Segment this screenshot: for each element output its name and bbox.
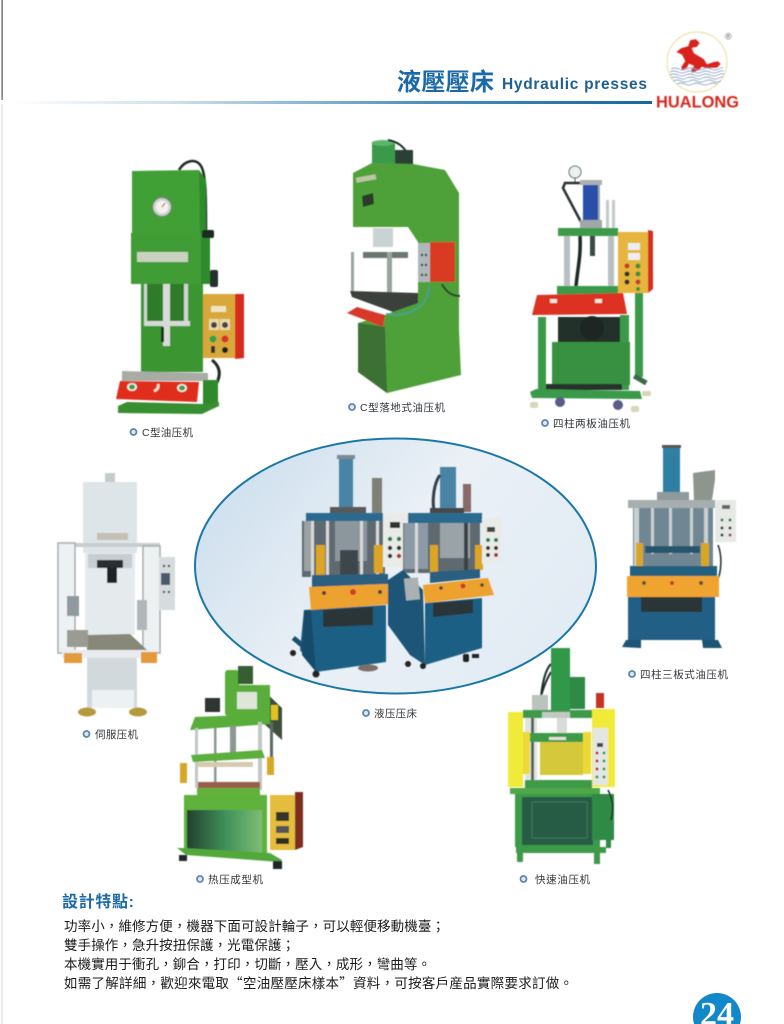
orange panel [309, 584, 394, 610]
control box [618, 230, 653, 293]
control box [418, 242, 455, 282]
section header rule [10, 101, 652, 104]
wheels and feet [530, 374, 651, 412]
left door [58, 543, 79, 653]
label: 液压压床: 液压压床 [374, 707, 418, 720]
label: 四柱三板式油压机: 四柱三板式油压机 [640, 668, 728, 681]
label: C型油压机: C型油压机 [142, 426, 194, 439]
control panel [482, 517, 502, 564]
machine: 伺服压机 [58, 473, 175, 716]
logo: Hualong dragon [656, 32, 739, 112]
label: C型落地式油压机: C型落地式油压机 [360, 401, 446, 414]
text block: feature description: 雙手操作，急升按扭保護，光電保護； [64, 934, 295, 954]
legs [517, 840, 611, 864]
red table [532, 293, 627, 315]
foot pads [78, 708, 147, 716]
logo wordmark: HUALONG [656, 92, 739, 112]
page number badge [693, 993, 741, 1024]
text block: feature description: 本機實用于衝孔，鉚合，打印，切斷，壓入，成形，彎曲等。 [64, 953, 431, 973]
control panel [715, 500, 736, 542]
icon: red dragon [676, 39, 721, 73]
title: chinese: 液壓壓床 [397, 69, 494, 96]
text block: feature description: 如需了解詳細，歡迎來電取“空油壓壓床樣本”資料，可按客户産品實際要求訂做。 [64, 972, 573, 992]
control panel [383, 513, 408, 567]
label: 四柱两板油压机: 四柱两板油压机 [553, 417, 630, 430]
label: 伺服压机: 伺服压机 [95, 728, 138, 741]
label: 快速油压机: 快速油压机 [535, 873, 590, 886]
machine: 四柱三板式油压机 [622, 445, 736, 648]
controller box [270, 792, 303, 850]
control panel [593, 728, 608, 785]
registered mark: ® [725, 32, 732, 42]
control panel [159, 557, 175, 610]
machine: C型落地式油压机 [347, 140, 461, 393]
orange panel [627, 576, 719, 597]
machine: 热压成型机 [177, 666, 303, 869]
machine: C型油压机 [116, 161, 244, 414]
icon: waves [670, 68, 724, 85]
title: english: Hydraulic presses [502, 76, 647, 93]
right unit [388, 467, 502, 669]
machine: 四柱两板油压机 [530, 166, 653, 412]
red table panel [116, 381, 199, 402]
label: 热压成型机: 热压成型机 [208, 873, 264, 886]
text block: feature description: 功率小，維修方便，機器下面可設計輪子，可以輕便移動機臺； [64, 915, 445, 935]
left unit [290, 455, 408, 678]
right door [137, 546, 160, 653]
red front panel [347, 307, 385, 327]
pressure gauge [569, 166, 581, 184]
yellow guards [508, 709, 615, 787]
machine: 快速油压机 [508, 648, 615, 864]
feet [179, 855, 282, 869]
machine: 液压压床 pair [290, 455, 502, 678]
heading: design features: 設計特點: [62, 892, 134, 911]
orange panel [423, 578, 494, 603]
text block: feature description [64, 915, 573, 992]
C opening parts [373, 228, 393, 247]
panel: feature ellipse [195, 438, 596, 694]
pressure gauge [152, 198, 172, 216]
control box [203, 294, 244, 359]
